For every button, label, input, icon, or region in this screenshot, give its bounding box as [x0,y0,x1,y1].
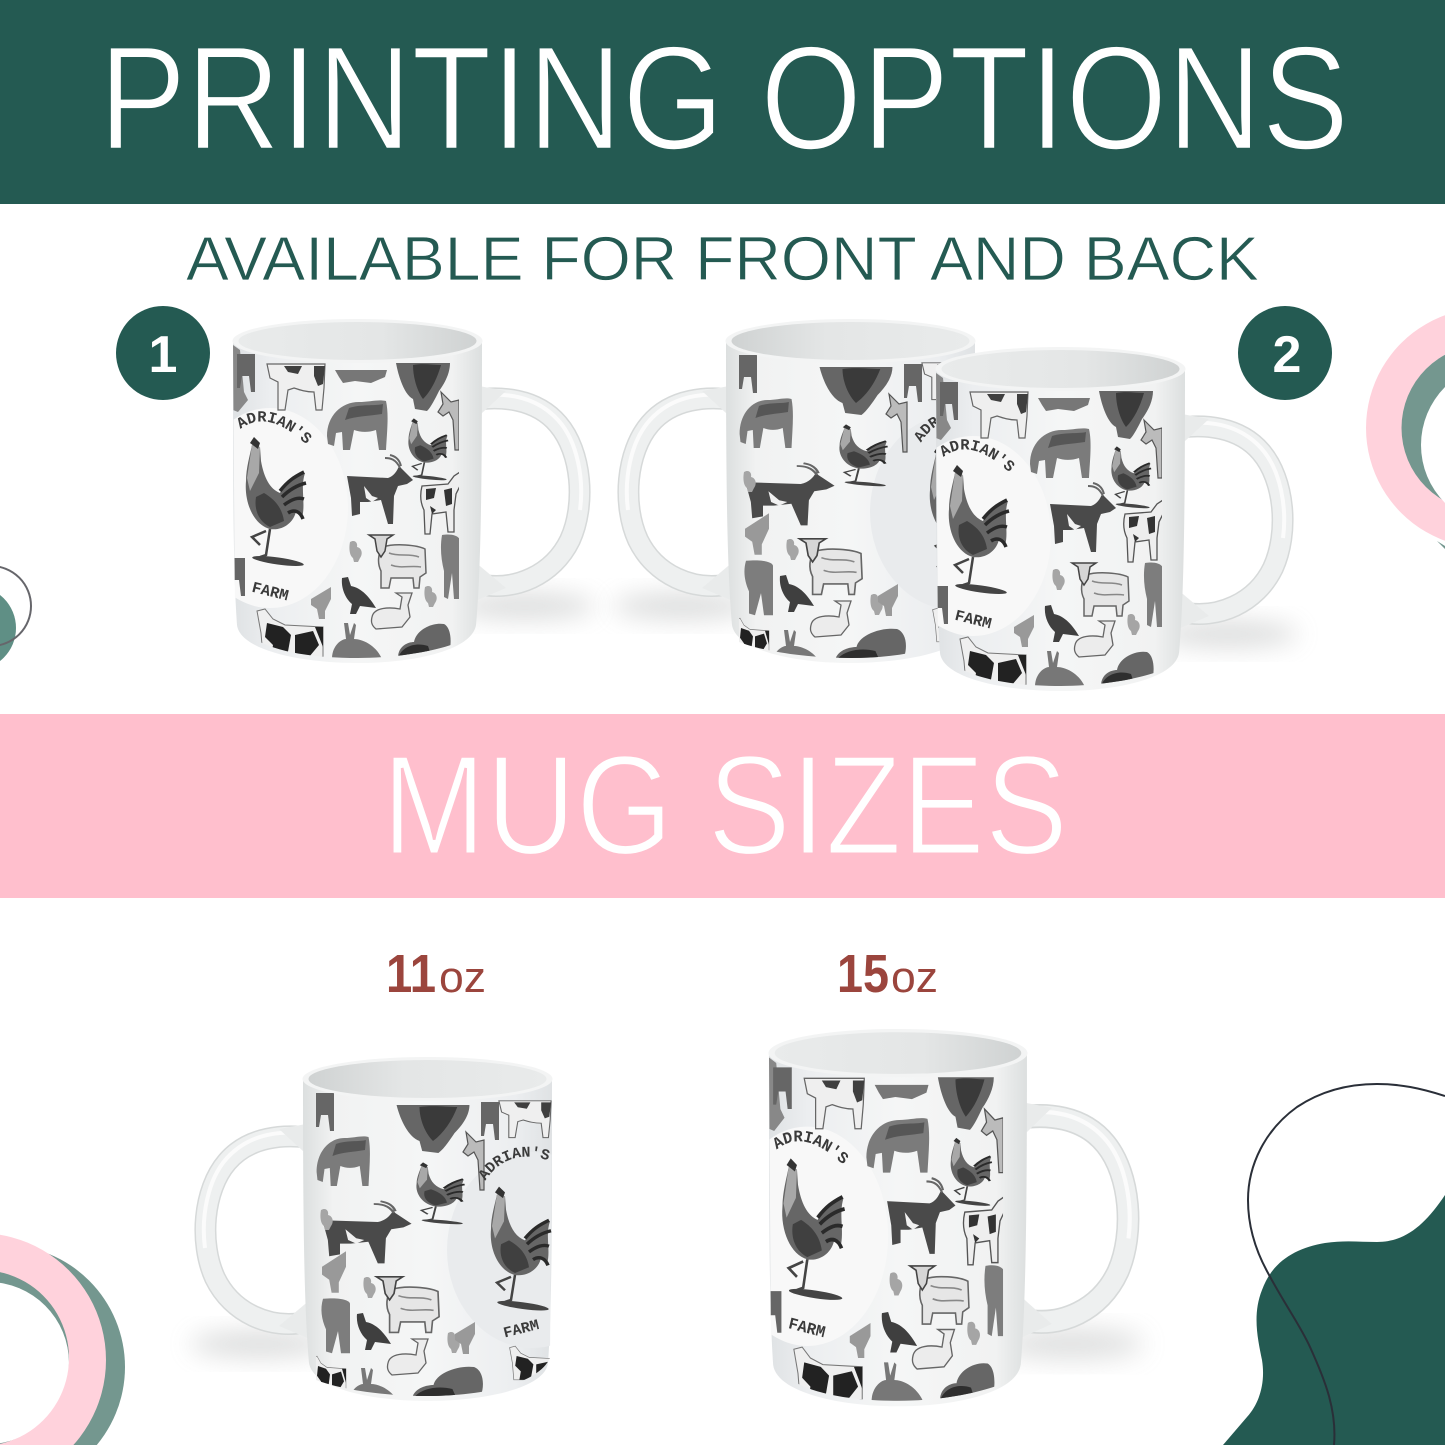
badge 2 [1238,306,1332,400]
mug sizes heading: MUG SIZES [382,726,1068,885]
mug 3: front print, front of pair: FARM [953,607,993,633]
decoration: left rings [0,566,31,670]
mug 2: back print: ADRIAN'S [914,417,936,443]
badge 1: 1 [149,326,177,384]
mug 4: 11oz: FARM [502,1317,541,1342]
decoration: bottom right outline [1248,1084,1445,1445]
label: 15oz: oz [891,953,938,1002]
mug sizes band [0,714,1445,898]
badge 2: 2 [1273,326,1301,384]
mug 5: 15oz: FARM [787,1315,827,1342]
subtitle: AVAILABLE FOR FRONT AND BACK [186,225,1259,294]
mug 4: 11oz [193,1057,552,1401]
decoration: bottom left rings [0,1233,125,1445]
mug 3: front print, front of pair: ADRIAN'S [940,439,1014,471]
decoration: right rings [1366,308,1445,549]
label: 15oz [837,944,938,1004]
mug 4: 11oz: ADRIAN'S [479,1146,550,1181]
label: 11oz: oz [439,953,486,1002]
decoration: bottom right blob [1223,1195,1445,1445]
mug 5: 15oz: ADRIAN'S [774,1130,848,1164]
mug 2: back print [616,319,976,663]
mug 1: front print: ADRIAN'S [238,411,312,443]
mug 5: 15oz [768,1029,1141,1406]
badge 1 [116,306,210,400]
label: 15oz: 15 [837,944,889,1004]
label: 11oz [386,944,486,1004]
header band [0,0,1445,204]
label: 11oz: 11 [386,944,436,1004]
mug 3: front print, front of pair [936,347,1295,691]
mug 1: front print: FARM [250,579,290,605]
mug 1: front print [232,319,592,663]
